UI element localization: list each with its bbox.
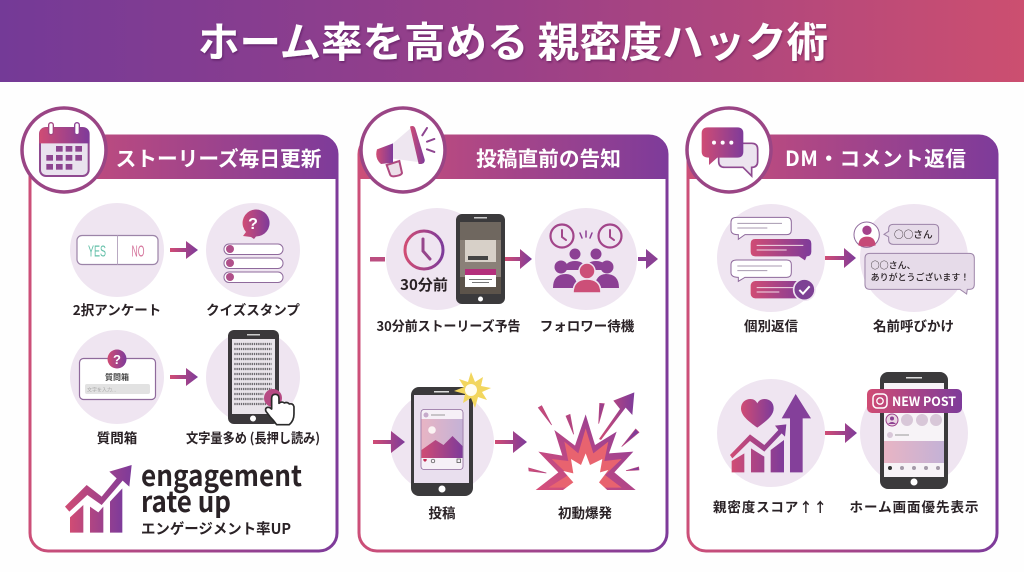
icon: growth chart: [65, 465, 132, 533]
arrow: [825, 423, 857, 443]
arrow: [170, 368, 198, 386]
icon circle: quiz stamp: [206, 203, 300, 297]
arrow: [373, 431, 405, 453]
label: 30分前ストーリーズ予告: [376, 315, 520, 335]
heading: 投稿直前の告知: [476, 142, 621, 172]
label: 文字量多め (長押し読み): [186, 427, 320, 447]
icon circle: name call: ○○さん: [894, 227, 933, 241]
icon: post phone: [390, 387, 494, 496]
arrow: [170, 241, 198, 259]
arrow: [505, 249, 532, 269]
callout: engagement rate up: rate up: [141, 479, 231, 521]
icon: long text phone: [206, 330, 300, 425]
icon: tap hand: [266, 394, 294, 425]
icon circle: name call: [854, 204, 974, 312]
icon: calendar: [22, 108, 106, 192]
arrow: [495, 431, 527, 453]
label: クイズスタンプ: [206, 299, 300, 319]
icon circle: question box: 質問箱: [105, 372, 129, 383]
label: 質問箱: [97, 427, 137, 447]
badge: new post: NEW POST: [892, 391, 956, 410]
icon circle: YES NO poll: YES: [88, 244, 106, 260]
callout: engagement rate up: [141, 453, 302, 539]
icon: sparkle: [454, 372, 491, 408]
title banner: [0, 0, 1024, 82]
icon circle: question box: [70, 330, 164, 424]
label: 個別返信: [744, 315, 798, 335]
icon circle: name call: ありがとうございます！: [871, 271, 969, 284]
icon circle: YES NO poll: [70, 203, 164, 297]
label: フォロワー待機: [540, 315, 635, 335]
arrow: [825, 248, 856, 268]
icon circle: 30 minutes before: 30分前: [400, 274, 448, 295]
panel: 投稿直前の告知: [359, 108, 667, 551]
label: 名前呼びかけ: [873, 315, 954, 335]
icon circle: question box: 文字を入力...: [87, 386, 117, 394]
icon: home phone new post: [860, 372, 968, 489]
icon: story phone: [456, 214, 505, 304]
icon circle: name call: ○○さん、: [871, 258, 916, 271]
label: 初動爆発: [558, 502, 612, 522]
icon circle: YES NO poll: NO: [132, 244, 144, 260]
label: 親密度スコア↑↑: [713, 496, 827, 516]
panel: ストーリーズ毎日更新: [22, 108, 337, 551]
callout: engagement rate up: engagement: [141, 453, 302, 495]
label: ホーム画面優先表示: [850, 496, 978, 516]
icon circle: 30 minutes before: [386, 208, 488, 310]
heading: ストーリーズ毎日更新: [116, 142, 322, 172]
title: ホーム率を高める 親密度ハック術: [198, 9, 828, 69]
icon circle: question box: ?: [113, 352, 121, 367]
icon circle: individual replies: [717, 204, 825, 312]
label: 投稿: [428, 502, 456, 522]
label: 2択アンケート: [73, 299, 161, 319]
heading: DM・コメント返信: [785, 142, 966, 172]
dash: [370, 257, 385, 262]
icon: chat bubbles: [687, 108, 771, 192]
callout: engagement rate up: エンゲージメント率UP: [141, 518, 291, 539]
icon circle: quiz stamp: ?: [248, 216, 258, 233]
arrow: [638, 249, 658, 269]
icon: megaphone: [361, 108, 445, 192]
panel: DM・コメント返信: [687, 108, 997, 551]
icon: explosion: [529, 392, 639, 491]
icon circle: followers waiting: [535, 208, 637, 310]
icon circle: closeness score: [717, 379, 825, 487]
